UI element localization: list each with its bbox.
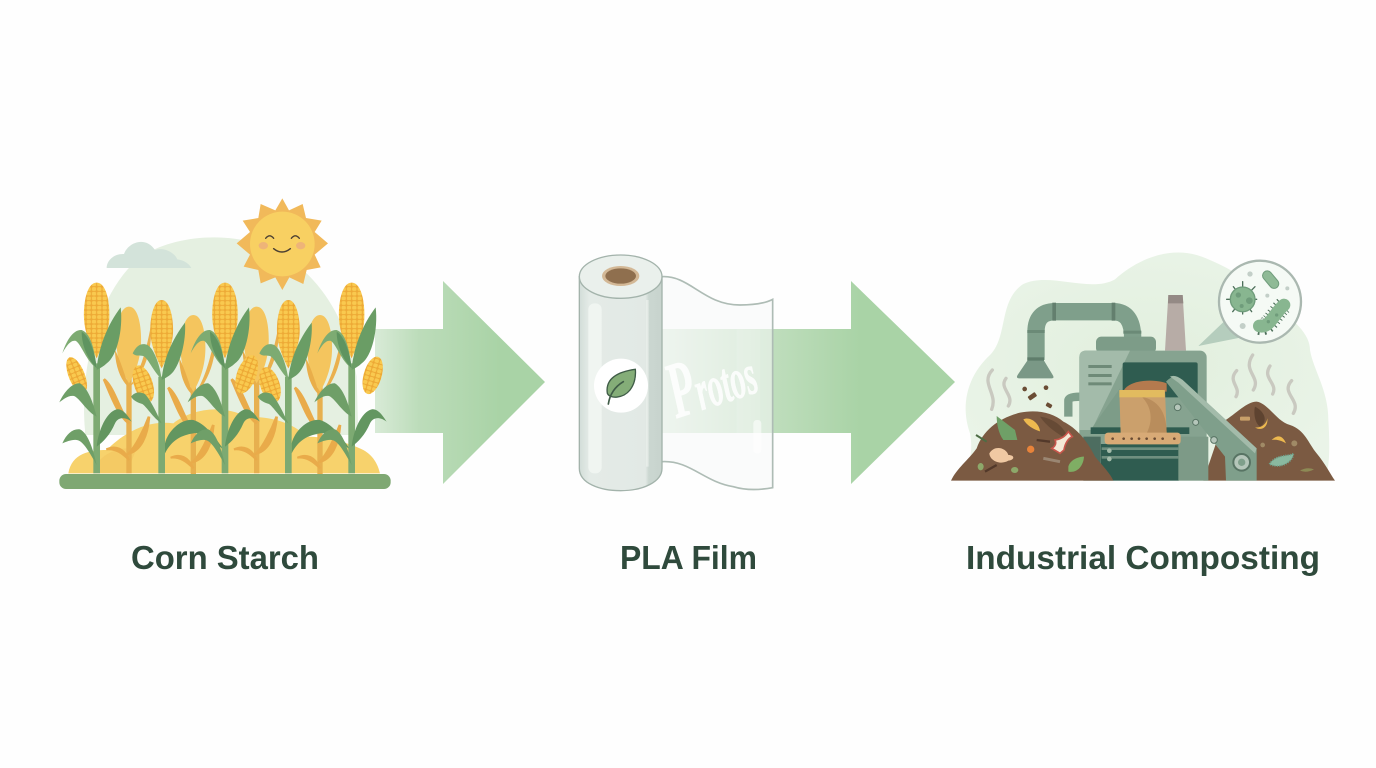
brand lettering on film: Protos [655, 324, 766, 436]
yellow corn plants [104, 307, 342, 482]
virus [1227, 282, 1257, 314]
label: industrial composting: Industrial Composting [966, 539, 1320, 576]
rod bacterium [1261, 269, 1281, 290]
roll core [602, 266, 639, 286]
film highlights [737, 329, 760, 435]
arrow: PLA film to industrial composting [660, 281, 955, 484]
microbe callout tail [1198, 318, 1242, 346]
left compost pile [951, 411, 1113, 481]
microbe magnifier callout [1219, 261, 1301, 343]
roll top [579, 255, 662, 298]
sun [237, 198, 328, 290]
composting machine [1068, 337, 1208, 481]
pale green sky dome [84, 237, 358, 435]
illustration: PLA film roll [579, 255, 773, 491]
conveyor arm [1166, 376, 1257, 481]
pale green background blob [960, 253, 1329, 481]
exhaust duct and hood [1017, 303, 1141, 378]
label: corn starch: Corn Starch [131, 539, 319, 576]
cloud [107, 242, 191, 268]
illustration: corn field with sun [59, 198, 391, 489]
unrolled transparent film [662, 277, 773, 490]
leaf badge [594, 359, 648, 413]
compost hopper bag [1105, 381, 1181, 444]
falling compost bits [1022, 385, 1053, 409]
yellow hills [68, 409, 380, 473]
steam wisps [988, 355, 1295, 413]
green corn plants [59, 283, 387, 473]
chimney [1165, 295, 1186, 351]
right compost pile [1203, 402, 1335, 481]
arrow: corn starch to PLA film [375, 281, 545, 484]
label: PLA film: PLA Film [620, 539, 757, 576]
spiky bacterium [1259, 305, 1284, 326]
illustration: industrial composting [951, 253, 1335, 481]
roll body [579, 277, 662, 491]
ground bar [59, 474, 391, 489]
side ears of corn [62, 352, 387, 405]
